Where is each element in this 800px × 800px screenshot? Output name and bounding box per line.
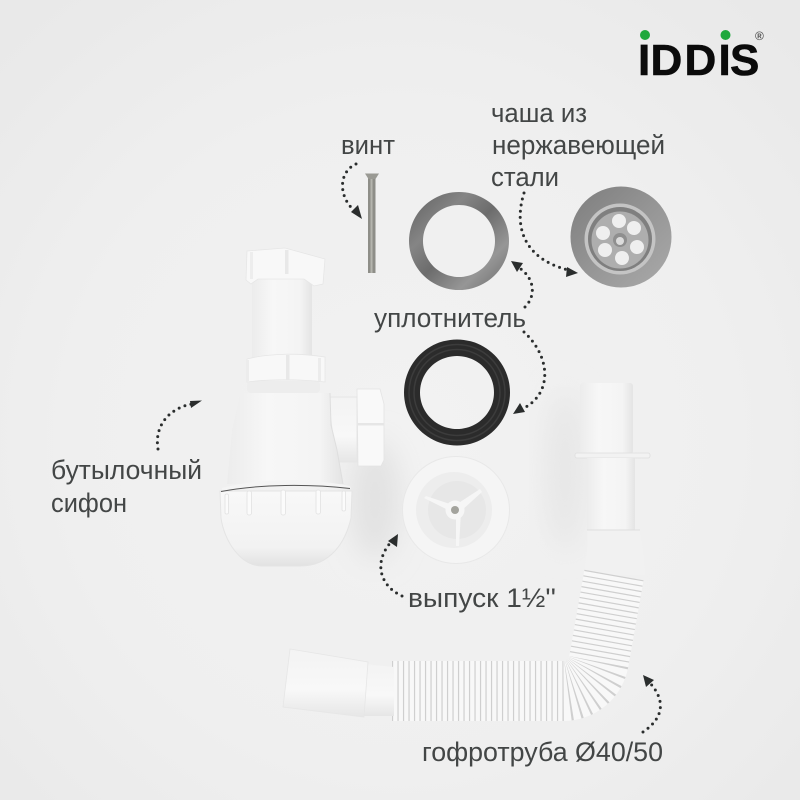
icon: bottle siphon [220,248,384,566]
logo: IDDIS: ® [755,29,764,43]
side nut [357,389,384,466]
arrow: бутылочный сифон [157,400,202,449]
arrow: уплотнитель to washer [511,261,532,307]
flange [575,453,650,458]
label: уплотнитель: уплотнитель [374,303,526,333]
arrow: чаша [520,193,578,277]
icon: outlet 1½ [402,456,510,564]
label: бутылочный сифон: сифон [51,488,127,518]
top nut [246,248,325,286]
upper tube [252,277,312,359]
arrow: винт [342,164,362,219]
body [227,393,343,484]
icon: corrugated pipe [283,383,650,717]
label: чаша из нержавеющей стали [491,98,665,192]
logo: IDDIS: IDDIS [638,36,759,85]
label: бутылочный сифон: бутылочный [51,455,202,485]
arrow: уплотнитель to seal [513,332,545,414]
icon: stainless steel bowl [570,186,672,288]
label: чаша из нержавеющей стали: нержавеющей [492,130,665,160]
corrugated hose [392,575,614,691]
label: чаша из нержавеющей стали: чаша из [491,98,587,128]
collar [247,381,320,393]
top cylinder [580,383,633,454]
arrow: выпуск [381,534,402,596]
icon: steel washer [409,192,509,290]
side outlet tube [328,397,357,462]
lower cup [220,491,352,566]
label: винт: винт [341,130,395,160]
rim [222,480,351,491]
label: гофротруба Ø40/50: гофротруба Ø40/50 [422,737,663,767]
label: выпуск 1½'': выпуск 1½'' [408,583,556,613]
middle nut [246,354,325,382]
funnel [583,530,645,575]
label: бутылочный сифон [51,455,202,518]
icon: black rubber seal [404,340,510,446]
outlet cylinder [283,649,368,717]
label: чаша из нержавеющей стали: стали [491,162,559,192]
outlet second sleeve [364,664,394,716]
lower tube [587,458,635,530]
icon: screw [365,174,379,273]
arrow: гофротруба [643,675,660,732]
